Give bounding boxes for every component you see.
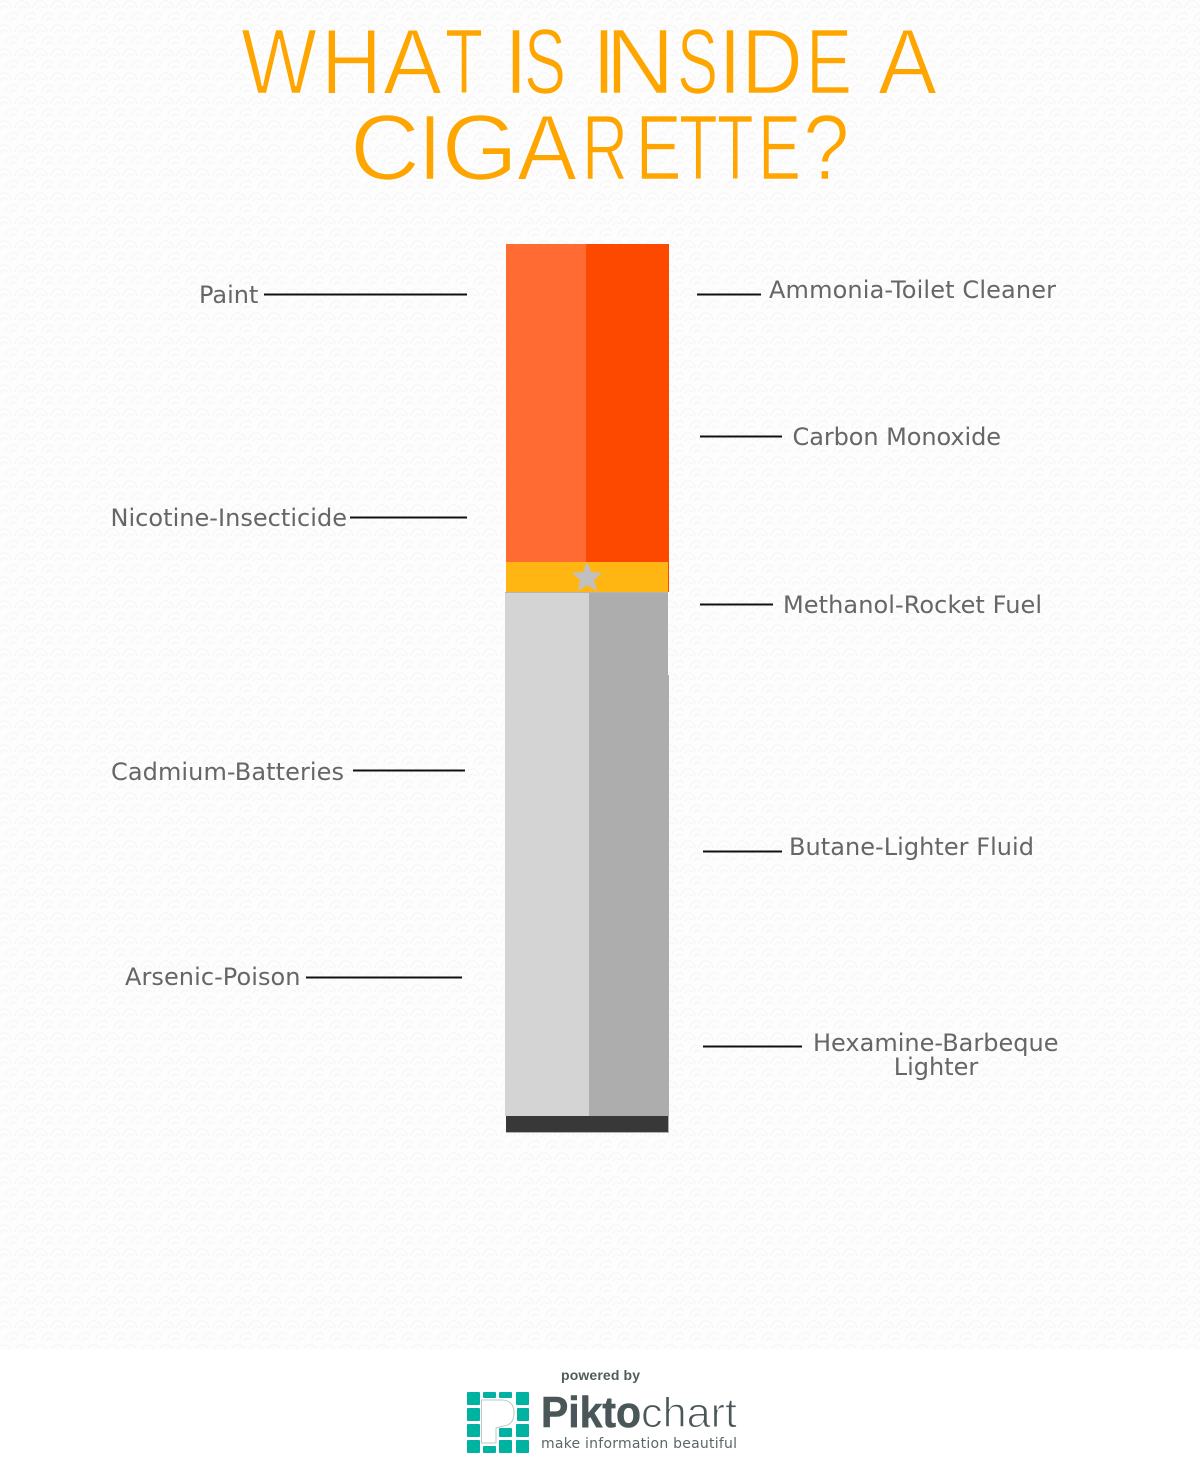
title: E — [758, 96, 801, 200]
title: E — [636, 96, 682, 200]
title: R — [582, 96, 628, 200]
title: I — [418, 96, 442, 200]
title: A — [517, 96, 577, 200]
title: W — [241, 10, 317, 114]
title: I — [504, 10, 528, 114]
wordmark: Piktochart — [541, 1388, 737, 1437]
title: T — [679, 96, 718, 200]
label: Ammonia-Toilet Cleaner: Ammonia-Toilet Cleaner — [769, 276, 1056, 304]
cigarette: burning tip — [506, 244, 669, 562]
label: Hexamine-Barbeque Lighter — [703, 1029, 1058, 1081]
footer: powered by Piktochart — [467, 1367, 737, 1453]
label: Hexamine-Barbeque Lighter: Hexamine-Barbeque — [813, 1029, 1058, 1057]
powered by text: powered by — [561, 1367, 640, 1383]
title: G — [442, 96, 518, 200]
title: H — [321, 10, 382, 114]
icon: star — [572, 562, 602, 591]
label: Arsenic-Poison: Arsenic-Poison — [125, 963, 300, 991]
tagline: make information beautiful — [541, 1436, 737, 1452]
label: Nicotine-Insecticide: Nicotine-Insecticide — [110, 504, 347, 532]
title: D — [741, 10, 803, 114]
label: Paint: Paint — [199, 281, 258, 309]
cigarette — [505, 244, 669, 1133]
title: I — [718, 10, 742, 114]
label: Hexamine-Barbeque Lighter: Lighter — [894, 1053, 978, 1081]
label: Carbon Monoxide: Carbon Monoxide — [792, 423, 1001, 451]
title: ? — [803, 96, 850, 200]
label: Butane-Lighter Fluid: Butane-Lighter Fluid — [789, 833, 1034, 861]
title: I — [592, 10, 616, 114]
title: T — [717, 96, 754, 200]
icon: Piktochart logo — [467, 1392, 529, 1453]
cigarette: gold band — [506, 562, 669, 592]
label: Cadmium-Batteries: Cadmium-Batteries — [111, 758, 344, 786]
title: E — [806, 10, 852, 114]
title — [241, 10, 937, 200]
title: C — [350, 96, 420, 200]
title: S — [677, 10, 718, 114]
cigarette: paper body — [505, 592, 669, 1116]
title: A — [878, 10, 937, 114]
label: Methanol-Rocket Fuel: Methanol-Rocket Fuel — [783, 591, 1042, 619]
cigarette: dark end — [506, 1116, 669, 1133]
title: A — [383, 10, 442, 114]
title: S — [524, 10, 566, 114]
title: T — [445, 10, 482, 114]
title: N — [605, 10, 675, 114]
